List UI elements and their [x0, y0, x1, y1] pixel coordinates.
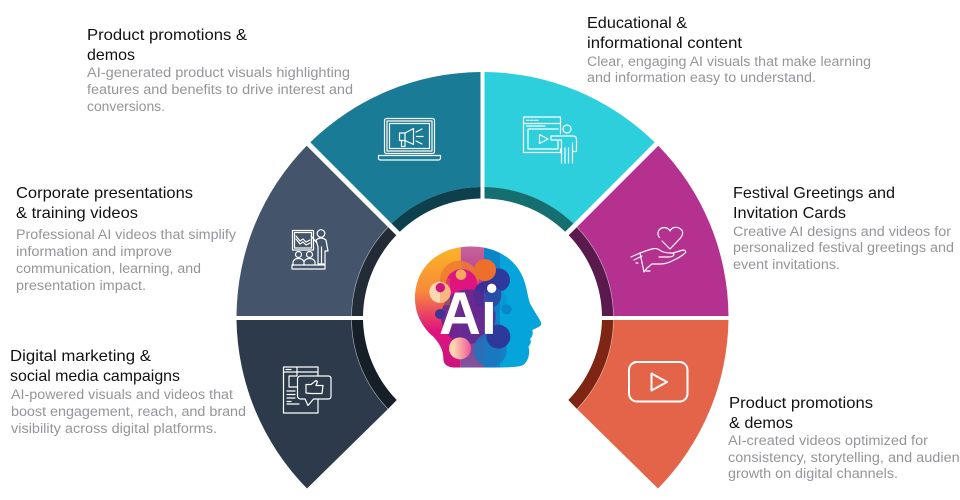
text block: festival greetings: event invitations. — [733, 257, 840, 272]
text block: corporate presentations: presentation impact. — [16, 278, 146, 293]
text block: educational content: Educational & — [587, 15, 687, 32]
panel: festival greetings sector (middle right) — [569, 146, 728, 316]
panel: product promotions sector (top left) — [310, 72, 480, 232]
text block: product promotions and demos (top left) — [87, 27, 353, 114]
icon: presenter with audience — [292, 230, 328, 269]
text block: product promotions and demos (top left): Product promotions & — [87, 27, 247, 44]
text block: educational content: Clear, engaging AI visuals that make learning — [587, 54, 871, 69]
text block: digital marketing — [10, 348, 246, 436]
text block: digital marketing: Digital marketing & — [10, 348, 151, 365]
text block: product promotions and demos (bottom right): & demos — [729, 415, 793, 432]
icon: video play button — [629, 362, 688, 402]
text block: product promotions and demos (bottom right): Product promotions — [729, 395, 873, 412]
text block: product promotions and demos (top left): conversions. — [87, 99, 165, 114]
text block: corporate presentations: Professional AI videos that simplify — [16, 227, 236, 242]
text block: product promotions and demos (bottom right): growth on digital channels. — [728, 466, 898, 481]
text block: festival greetings: Invitation Cards — [733, 205, 846, 222]
text block: educational content: and information easy to understand. — [587, 70, 816, 85]
text block: product promotions and demos (bottom right): consistency, storytelling, and audience — [728, 450, 960, 465]
text block: product promotions and demos (top left): demos — [87, 47, 135, 64]
text block: corporate presentations: & training videos — [16, 205, 138, 222]
text block: product promotions and demos (top left): features and benefits to drive interest and — [87, 82, 353, 97]
text block: digital marketing: visibility across digital platforms. — [11, 421, 217, 436]
text block: corporate presentations: communication, learning, and — [16, 261, 201, 276]
panel: video promotions sector (bottom right) — [568, 320, 728, 488]
text block: product promotions and demos (bottom right): AI-created videos optimized for — [728, 433, 929, 448]
icon: AI head logo — [415, 246, 542, 368]
text block: corporate presentations: Corporate presentations — [16, 185, 193, 202]
text block: digital marketing: boost engagement, reach, and brand — [11, 404, 246, 419]
text block: corporate presentations: information and improve — [16, 244, 172, 259]
text block: educational content: informational content — [587, 35, 743, 52]
icon: laptop with megaphone — [378, 118, 440, 160]
panel: corporate presentations sector (middle left) — [236, 146, 396, 316]
icon: video lesson presenter — [524, 117, 576, 163]
text block: digital marketing: social media campaigns — [10, 368, 180, 385]
text block: product promotions and demos (bottom right) — [728, 395, 960, 481]
text block: digital marketing: AI-powered visuals and videos that — [11, 387, 233, 402]
icon: hand holding heart — [631, 227, 686, 272]
text block: festival greetings — [733, 185, 954, 272]
icon: social post with thumbs up — [284, 367, 331, 413]
panel: digital marketing sector (bottom left) — [236, 320, 397, 488]
text block: festival greetings: personalized festival greetings and — [733, 240, 954, 255]
text block: festival greetings: Creative AI designs and videos for — [733, 224, 952, 239]
text: Ai letters: Ai — [439, 280, 497, 347]
text block: festival greetings: Festival Greetings and — [733, 185, 895, 202]
text block: corporate presentations — [16, 185, 236, 293]
panel: educational content sector (top right) — [484, 72, 655, 232]
text block: product promotions and demos (top left): AI-generated product visuals highlighting — [87, 65, 350, 80]
text block: educational content — [587, 15, 871, 85]
